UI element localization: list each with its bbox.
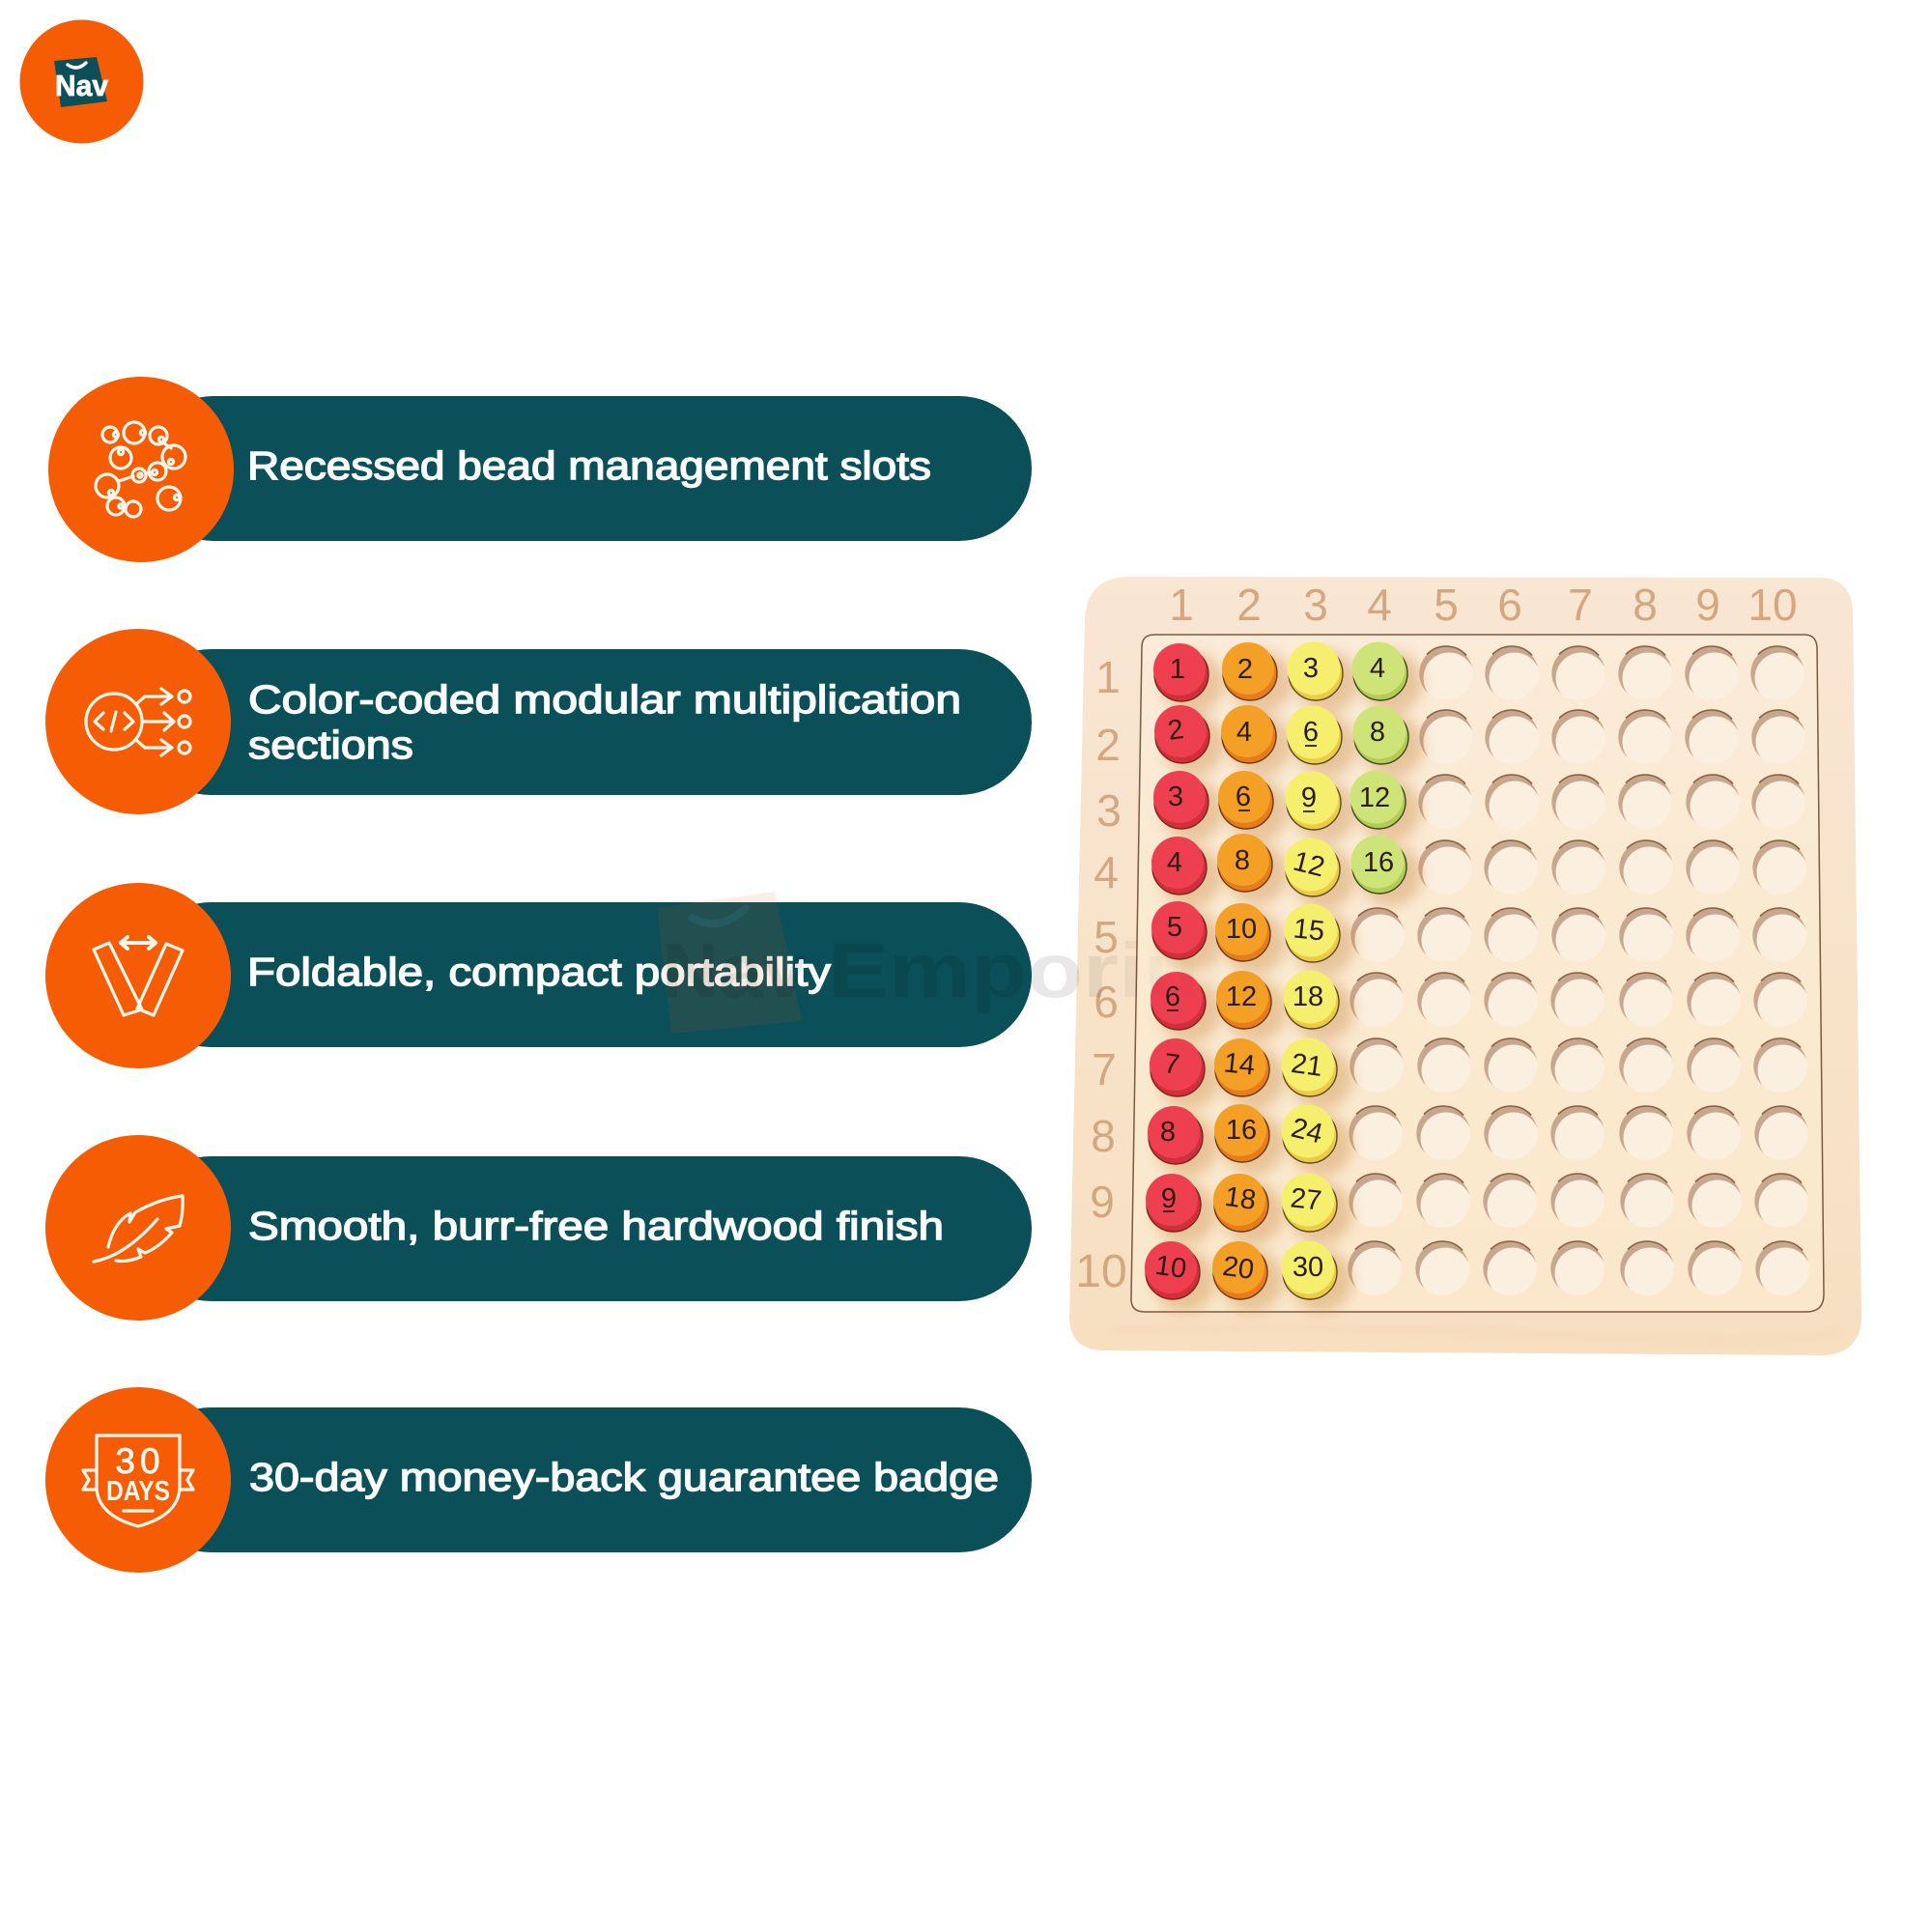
peg numbers: 8	[1370, 717, 1385, 748]
peg numbers: 12	[1359, 782, 1390, 813]
icon circle	[45, 629, 231, 814]
peg numbers: 4	[1370, 653, 1385, 684]
row numbers: 8	[1091, 1111, 1116, 1161]
label: Color-coded modular multiplication	[248, 677, 961, 722]
watermark: Nav	[662, 927, 808, 1013]
icon: beads	[96, 422, 185, 517]
row numbers: 7	[1092, 1044, 1117, 1094]
label: Smooth, burr-free hardwood finish	[248, 1204, 944, 1248]
pill	[138, 902, 1032, 1047]
peg numbers: 30	[1293, 1252, 1323, 1283]
label	[248, 677, 961, 767]
peg numbers: 5	[1167, 912, 1182, 943]
feature row: foldable	[45, 883, 1032, 1068]
column numbers	[1169, 580, 1798, 630]
peg numbers: 12	[1290, 846, 1328, 883]
watermark: Emporium	[828, 927, 1282, 1013]
label: sections	[248, 723, 413, 767]
icon circle	[45, 883, 231, 1068]
peg numbers: 24	[1288, 1113, 1326, 1150]
row numbers: 6	[1094, 977, 1119, 1027]
peg numbers: 18	[1223, 1181, 1258, 1216]
peg numbers: 10	[1153, 1250, 1188, 1285]
peg numbers: 4	[1167, 847, 1182, 878]
peg numbers: 4	[1236, 717, 1252, 748]
peg numbers: 27	[1289, 1182, 1323, 1217]
row numbers: 5	[1094, 912, 1119, 962]
peg numbers: 9	[1161, 1183, 1177, 1214]
peg numbers: 21	[1290, 1048, 1324, 1083]
peg number underlines	[1163, 746, 1317, 1211]
peg numbers: 1	[1170, 654, 1185, 685]
column numbers: 2	[1236, 580, 1262, 630]
peg numbers: 2	[1166, 714, 1185, 747]
row numbers	[1075, 652, 1127, 1297]
orange pegs column 2	[1212, 642, 1277, 1299]
peg numbers: 7	[1162, 1048, 1181, 1081]
feature row: recessed bead slots	[48, 377, 1032, 562]
peg numbers: 3	[1303, 653, 1319, 684]
logo badge: Nav	[55, 69, 109, 102]
peg numbers: 8	[1160, 1117, 1176, 1148]
row numbers: 9	[1090, 1177, 1115, 1227]
peg numbers: 16	[1363, 847, 1394, 878]
icon: 30 days badge: 30	[115, 1441, 165, 1481]
peg numbers: 15	[1292, 913, 1326, 948]
column numbers: 6	[1497, 580, 1522, 630]
feature row: colour-coded sections	[45, 629, 1032, 814]
yellow pegs column 3	[1281, 641, 1343, 1299]
wooden multiplication board	[1069, 577, 1861, 1355]
icon: feather	[94, 1196, 183, 1262]
peg numbers: 18	[1293, 981, 1323, 1012]
column numbers: 9	[1695, 580, 1720, 630]
label: 30-day money-back guarantee badge	[249, 1455, 999, 1499]
feature row: 30-day guarantee	[45, 1387, 1032, 1573]
row numbers: 3	[1096, 785, 1122, 836]
peg numbers: 6	[1165, 981, 1180, 1012]
label: Foldable, compact portability	[247, 950, 832, 994]
feature row: hardwood finish	[45, 1135, 1032, 1321]
row numbers: 2	[1095, 720, 1121, 770]
peg numbers: 6	[1303, 717, 1319, 748]
icon: folded board	[94, 937, 183, 1015]
row numbers: 4	[1094, 847, 1119, 897]
column numbers: 4	[1367, 580, 1392, 630]
watermark	[657, 892, 1282, 1034]
peg numbers: 6	[1236, 781, 1251, 812]
green pegs column 4	[1350, 641, 1408, 894]
peg numbers: 8	[1235, 845, 1250, 876]
pill	[138, 1156, 1032, 1301]
icon: 30 days badge	[83, 1435, 193, 1526]
icon circle	[48, 377, 234, 562]
peg numbers: 3	[1168, 781, 1183, 812]
pill	[141, 396, 1032, 541]
icon circle	[45, 1135, 231, 1321]
logo badge	[19, 19, 143, 143]
peg numbers: 10	[1226, 914, 1257, 945]
label: Recessed bead management slots	[247, 443, 931, 488]
empty holes	[1348, 646, 1810, 1298]
column numbers: 5	[1434, 580, 1459, 630]
peg numbers: 14	[1222, 1047, 1257, 1082]
red pegs column 1	[1145, 643, 1209, 1299]
pill	[138, 1407, 1032, 1552]
column numbers: 8	[1633, 580, 1658, 630]
peg numbers: 2	[1237, 654, 1253, 685]
peg numbers: 20	[1221, 1251, 1256, 1286]
pill	[138, 649, 1032, 795]
peg numbers: 16	[1226, 1115, 1257, 1146]
peg numbers	[1153, 653, 1394, 1286]
icon circle	[45, 1387, 231, 1573]
board base	[1069, 577, 1861, 1355]
column numbers: 3	[1303, 580, 1328, 630]
column numbers: 7	[1568, 580, 1593, 630]
row numbers: 10	[1075, 1246, 1127, 1297]
peg numbers: 12	[1226, 981, 1257, 1012]
row numbers: 1	[1095, 652, 1121, 702]
inner recessed panel	[1131, 635, 1824, 1312]
peg numbers: 9	[1301, 782, 1317, 813]
wood grain	[1111, 1329, 1840, 1341]
peg shadows	[1153, 651, 1424, 1312]
column numbers: 1	[1169, 580, 1194, 630]
column numbers: 10	[1747, 580, 1798, 630]
icon: code arrows	[86, 689, 190, 755]
icon: 30 days badge: DAYS	[106, 1476, 170, 1507]
